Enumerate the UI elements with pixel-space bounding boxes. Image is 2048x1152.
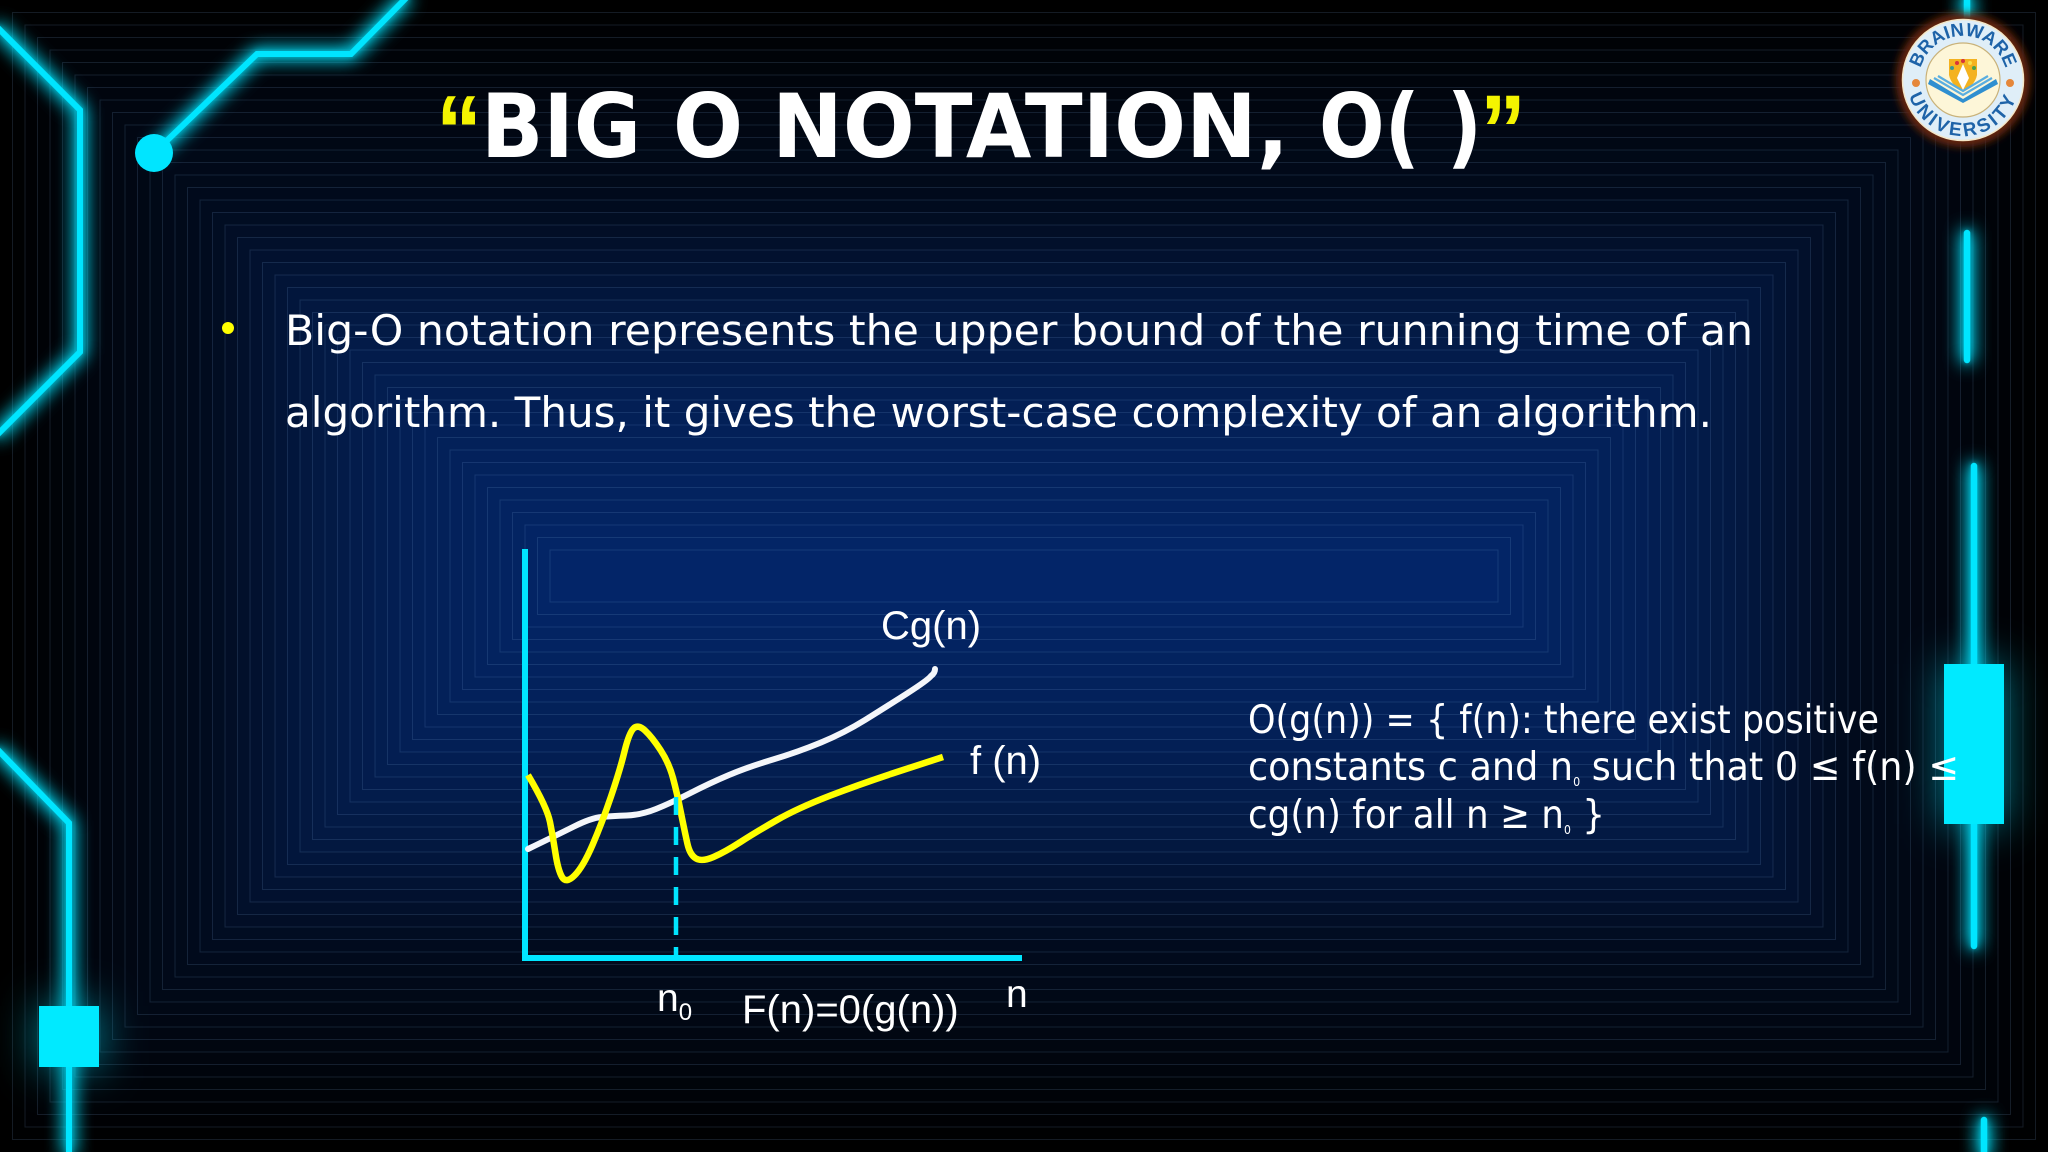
definition line 3: } — [1571, 792, 1605, 838]
label: f (n): f (n) — [970, 739, 1041, 783]
title: O( ) — [1319, 75, 1482, 178]
definition line 2: such that 0 ≤ f(n) ≤ — [1580, 744, 1959, 790]
definition line 2: constants c and n — [1248, 744, 1599, 790]
label: F(n)=0(g(n)): F(n)=0(g(n)) — [742, 988, 959, 1032]
label: Cg(n): Cg(n) — [881, 604, 981, 648]
logo text top: BRAINWARE — [1909, 22, 2017, 68]
bullet text block — [222, 306, 1753, 437]
definition line 1: O(g(n)) = { f(n): there exist positive — [1248, 697, 1879, 743]
bullet marker — [222, 322, 234, 334]
title: BIG — [481, 75, 641, 178]
line 2: algorithm. Thus, it gives the worst-case complexity of an algorithm. — [285, 388, 1712, 437]
label: n: n — [1006, 973, 1028, 1016]
line 1: Big-O notation represents the upper bound of the running time of an — [285, 306, 1753, 355]
logo halo — [1896, 13, 2030, 147]
logo: Brainware University — [1891, 6, 2035, 152]
definition line 3: cg(n) for all n ≥ n — [1248, 792, 1597, 838]
title: NOTATION, — [772, 75, 1289, 178]
title: “ — [436, 75, 482, 187]
chart axes — [525, 549, 1022, 958]
circuit lines: right side — [1967, 0, 1984, 1152]
logo inner disc — [1926, 43, 2000, 117]
chart: f(n) vs Cg(n) — [525, 549, 1041, 1032]
glow halos behind connector squares — [39, 664, 2004, 1067]
definition text block — [1248, 697, 1959, 838]
curve: Cg(n) — [528, 669, 935, 849]
title: O — [673, 75, 743, 178]
circuit lines: left side — [0, 0, 408, 1152]
logo outer disc — [1902, 20, 2024, 140]
connector block: right — [1944, 664, 2004, 824]
logo book — [1928, 79, 1998, 103]
logo stars — [1912, 59, 2014, 87]
logo pen nib — [1957, 64, 1969, 90]
label: n0: n — [657, 977, 679, 1020]
logo book pages — [1934, 76, 1992, 95]
logo text bottom: UNIVERSITY — [1910, 91, 2014, 136]
logo shield — [1949, 59, 1977, 92]
definition line 3: 0 — [1564, 823, 1571, 837]
curve: f(n) — [528, 727, 943, 880]
definition line 2: 0 — [1573, 775, 1580, 789]
connector square: left — [39, 1006, 99, 1067]
dashed n0 marker — [674, 797, 678, 958]
title — [436, 75, 1526, 187]
circuit end node — [135, 134, 173, 172]
title: ” — [1480, 75, 1526, 187]
label: n0: 0 — [679, 999, 692, 1026]
